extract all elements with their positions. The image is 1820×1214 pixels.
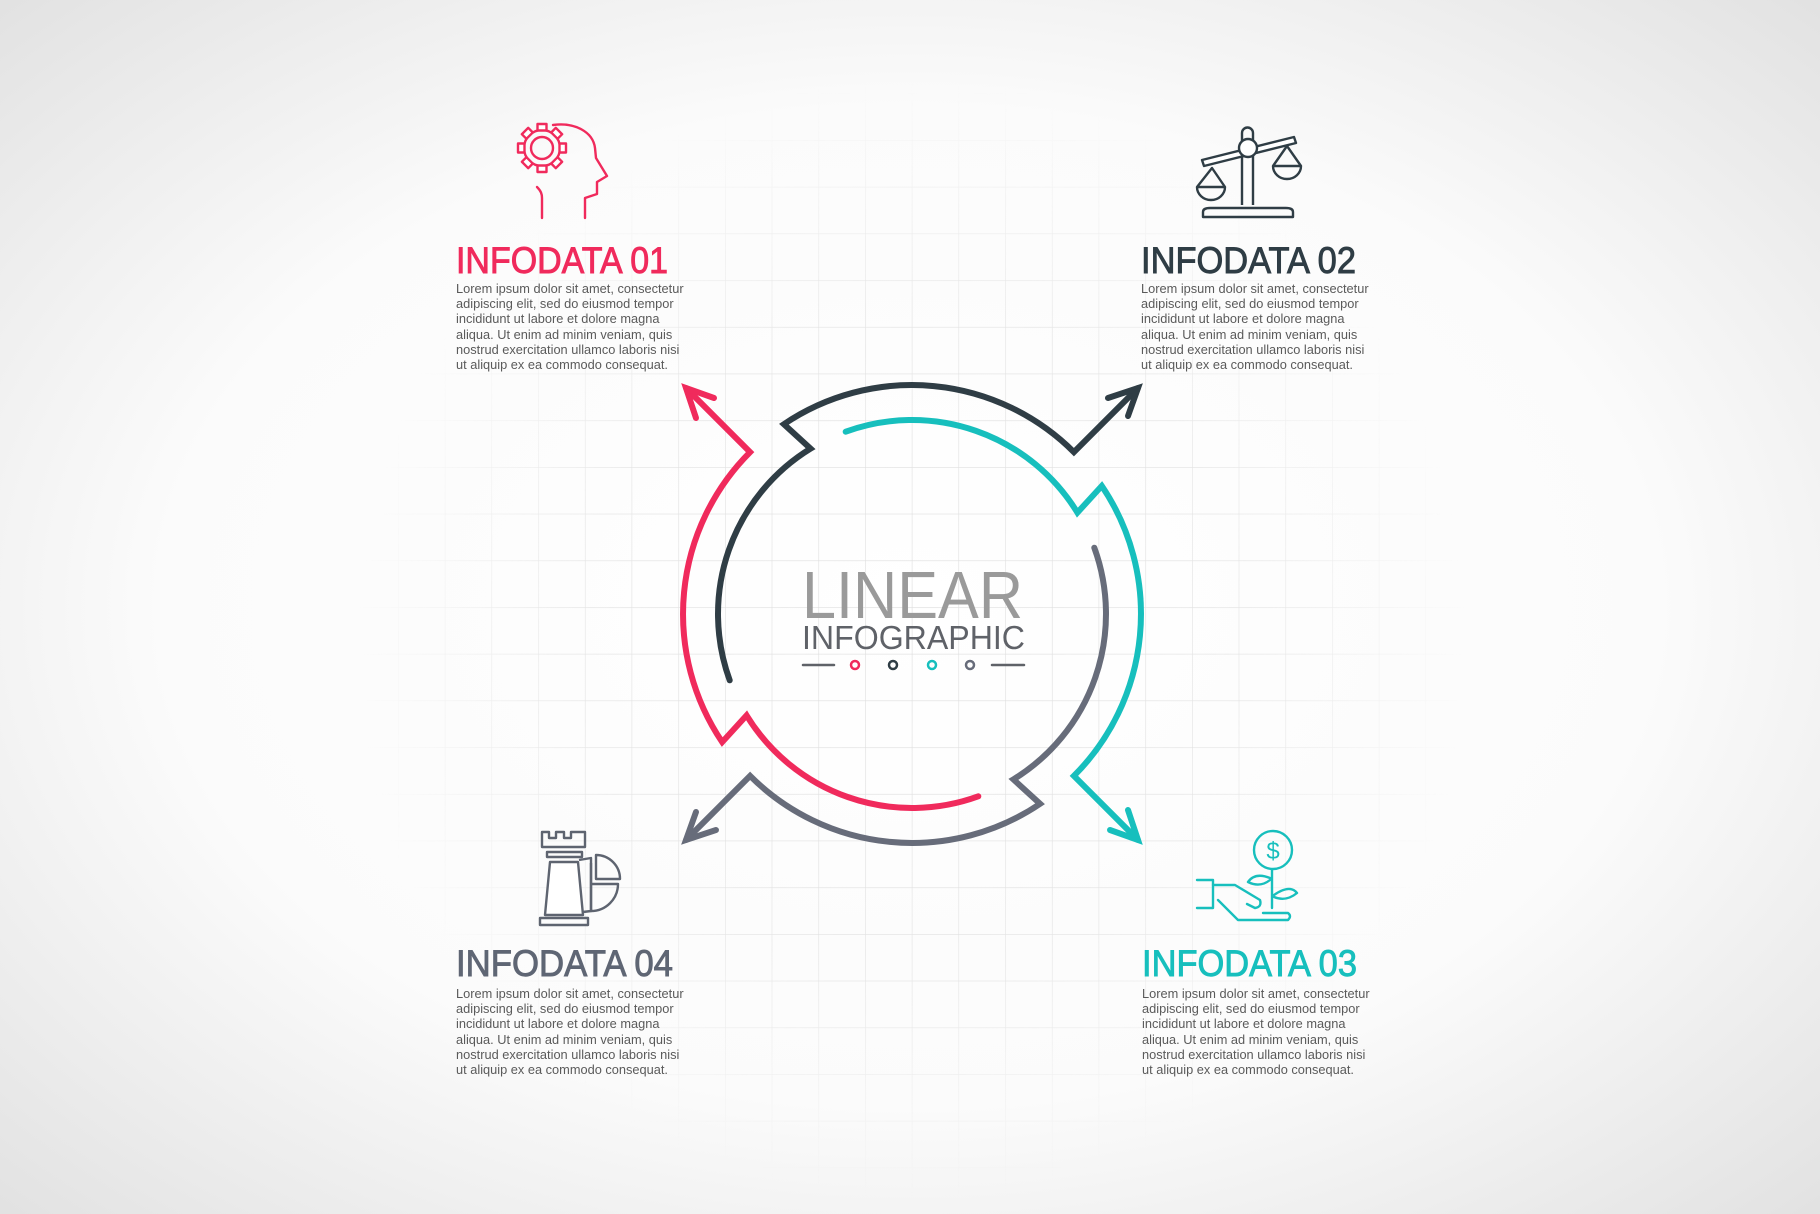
arrow: dark (to infodata 02) — [718, 385, 1138, 680]
block: infodata 03: Lorem ipsum dolor sit amet, consectetur — [1142, 986, 1370, 1001]
block: infodata 04: adipiscing elit, sed do eiusmod tempor — [456, 1001, 674, 1016]
icon: head with gear — [518, 124, 607, 218]
block: infodata 03: aliqua. Ut enim ad minim veniam, quis — [1142, 1032, 1358, 1047]
block: infodata 02: incididunt ut labore et dolore magna — [1141, 311, 1345, 326]
block: infodata 04: ut aliquip ex ea commodo consequat. — [456, 1062, 668, 1077]
block: infodata 04: nostrud exercitation ullamco laboris nisi — [456, 1047, 679, 1062]
block: infodata 01: Lorem ipsum dolor sit amet, consectetur — [456, 281, 684, 296]
block: infodata 02: nostrud exercitation ullamco laboris nisi — [1141, 342, 1364, 357]
block: infodata 04: aliqua. Ut enim ad minim veniam, quis — [456, 1032, 672, 1047]
block: infodata 03: incididunt ut labore et dolore magna — [1142, 1016, 1346, 1031]
center title: LINEAR — [802, 558, 1023, 633]
icon: hand with money plant — [1197, 831, 1297, 920]
block: infodata 03: nostrud exercitation ullamco laboris nisi — [1142, 1047, 1365, 1062]
block: infodata 02: INFODATA 02 — [1141, 240, 1356, 281]
block: infodata 02: aliqua. Ut enim ad minim veniam, quis — [1141, 327, 1357, 342]
icon: chess rook with pie — [540, 832, 620, 925]
block: infodata 04: INFODATA 04 — [456, 943, 673, 984]
block: infodata 03: adipiscing elit, sed do eiusmod tempor — [1142, 1001, 1360, 1016]
block: infodata 01: aliqua. Ut enim ad minim veniam, quis — [456, 327, 672, 342]
block: infodata 04 — [456, 943, 684, 1077]
block: infodata 01 — [456, 240, 684, 372]
block: infodata 01: adipiscing elit, sed do eiusmod tempor — [456, 296, 674, 311]
icon: scales — [1197, 128, 1301, 217]
block: infodata 03: ut aliquip ex ea commodo consequat. — [1142, 1062, 1354, 1077]
dots row — [803, 661, 1024, 669]
center title: INFOGRAPHIC — [802, 619, 1025, 656]
block: infodata 01: ut aliquip ex ea commodo consequat. — [456, 357, 668, 372]
block: infodata 03: INFODATA 03 — [1142, 943, 1357, 984]
icon: hand with money plant: $ — [1266, 838, 1280, 865]
center title — [802, 558, 1025, 669]
cycle diagram — [683, 385, 1141, 843]
arrow: grey (to infodata 04) — [686, 548, 1106, 843]
block: infodata 01: incididunt ut labore et dolore magna — [456, 311, 660, 326]
block: infodata 04: Lorem ipsum dolor sit amet, consectetur — [456, 986, 684, 1001]
block: infodata 04: incididunt ut labore et dolore magna — [456, 1016, 660, 1031]
arrow: red (to infodata 01) — [683, 388, 978, 808]
block: infodata 03 — [1142, 943, 1370, 1077]
block: infodata 02 — [1141, 240, 1369, 372]
block: infodata 01: INFODATA 01 — [456, 240, 668, 281]
block: infodata 02: Lorem ipsum dolor sit amet, consectetur — [1141, 281, 1369, 296]
block: infodata 02: adipiscing elit, sed do eiusmod tempor — [1141, 296, 1359, 311]
block: infodata 02: ut aliquip ex ea commodo consequat. — [1141, 357, 1353, 372]
block: infodata 01: nostrud exercitation ullamco laboris nisi — [456, 342, 679, 357]
arrow: teal (to infodata 03) — [846, 420, 1141, 840]
